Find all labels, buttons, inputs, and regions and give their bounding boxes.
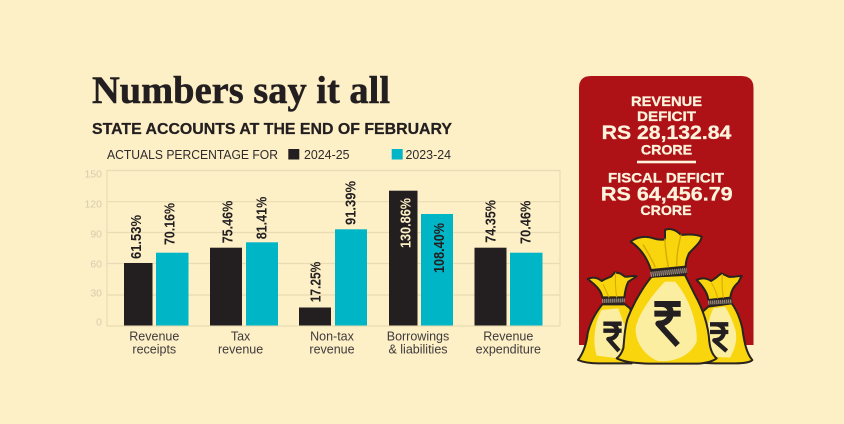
category labels: & liabilities — [388, 342, 448, 356]
fiscal deficit text — [601, 170, 733, 218]
bars: non-tax revenue: 17.25% — [308, 262, 325, 302]
bars: revenue expenditure: 70.46% — [518, 201, 535, 244]
bars: non-tax revenue: 91.39% — [343, 181, 360, 225]
legend — [107, 148, 451, 162]
revenue deficit text: REVENUE — [631, 93, 702, 109]
revenue deficit text: CRORE — [641, 141, 692, 157]
bars: revenue expenditure: 74.35% — [483, 200, 500, 243]
bars: revenue receipts — [124, 203, 188, 326]
bar chart — [84, 169, 560, 356]
category labels: Revenue — [483, 329, 533, 343]
icon: left bag — [578, 272, 638, 363]
y axis labels: 0 — [96, 317, 102, 329]
y axis labels: 120 — [84, 198, 102, 210]
legend: ACTUALS PERCENTAGE FOR — [107, 148, 278, 162]
category labels: Tax — [231, 329, 251, 343]
fiscal deficit text: CRORE — [640, 202, 692, 218]
bars: tax revenue: 81.41% — [254, 197, 271, 239]
y axis labels: 30 — [90, 288, 102, 300]
category labels: receipts — [132, 342, 176, 356]
legend: 2023-24 — [406, 148, 451, 162]
bars: borrowings and liabilities — [389, 191, 453, 326]
category labels: Borrowings — [387, 329, 449, 343]
bars: non-tax revenue — [299, 181, 367, 326]
bars: revenue receipts: 70.16% — [161, 203, 178, 245]
panel: deficit card — [579, 76, 754, 345]
icon: right bag — [692, 273, 752, 363]
bars: tax revenue — [210, 197, 278, 326]
bars: revenue expenditure — [474, 200, 542, 326]
y axis labels: 60 — [90, 258, 102, 270]
fiscal deficit text: RS 64,456.79 — [601, 185, 733, 206]
category labels: Revenue — [129, 329, 179, 343]
category labels — [129, 329, 541, 356]
icon: money bags — [578, 229, 752, 364]
y axis labels: 90 — [90, 228, 102, 240]
title: Numbers say it all — [92, 69, 390, 112]
y axis labels — [84, 169, 102, 329]
icon: center bag — [617, 229, 717, 364]
category labels: revenue — [309, 342, 355, 356]
bars: borrowings and liabilities: 108.40% — [431, 223, 448, 273]
revenue deficit text: DEFICIT — [637, 108, 696, 124]
revenue deficit text — [602, 93, 732, 157]
fiscal deficit text: FISCAL DEFICIT — [608, 170, 724, 186]
revenue deficit text: RS 28,132.84 — [602, 123, 732, 144]
bars: revenue receipts: 61.53% — [128, 215, 145, 259]
bars: borrowings and liabilities: 130.86% — [398, 198, 415, 248]
category labels: expenditure — [476, 342, 541, 356]
subtitle: STATE ACCOUNTS AT THE END OF FEBRUARY — [92, 121, 453, 138]
legend: 2024-25 — [304, 148, 350, 162]
divider — [637, 161, 696, 163]
bars: tax revenue: 75.46% — [219, 201, 236, 243]
y axis labels: 150 — [84, 169, 102, 181]
category labels: Non-tax — [310, 329, 355, 343]
category labels: revenue — [218, 342, 263, 356]
